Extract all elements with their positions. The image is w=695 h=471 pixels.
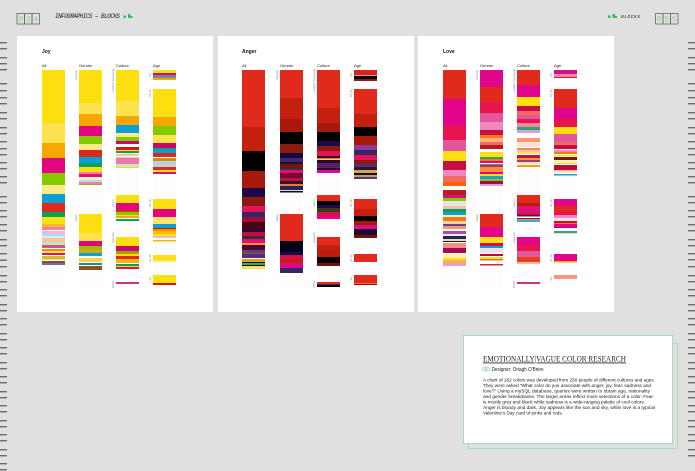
- heading: Anger: Anger: [242, 49, 256, 55]
- icon: green blocks right: [608, 14, 617, 18]
- axis labels: 26-35: [148, 199, 152, 207]
- bar: Joy All: [42, 70, 65, 290]
- body text: is mostly grey and black while sadness is a wide-ranging palette of cool colors.: [483, 400, 645, 406]
- column labels: [443, 63, 562, 68]
- column labels: Gender: [480, 63, 494, 68]
- column labels: Gender: [79, 63, 93, 68]
- column labels: Age: [153, 63, 161, 68]
- page number right: [656, 14, 678, 24]
- page number left: 4: [33, 16, 38, 24]
- axis labels: Spanish: [111, 232, 115, 243]
- bar: Anger Culture: [317, 70, 340, 290]
- axis labels: Other: [111, 280, 115, 288]
- panel: Anger: [218, 36, 414, 312]
- axis labels: Female: [74, 70, 78, 80]
- axis labels: English Speaking: [111, 68, 115, 92]
- axis labels: 46+: [148, 276, 152, 281]
- heading: Joy: Joy: [42, 49, 51, 55]
- column labels: Culture: [317, 63, 331, 68]
- bar: Joy Culture: [116, 70, 139, 290]
- designer credit: Designer: Oriagh O'Brien: [492, 367, 544, 373]
- header right: BLOCKS: [621, 14, 640, 20]
- axis labels: 26-35: [549, 199, 553, 207]
- page number right: 0: [657, 16, 662, 24]
- axis labels: 46+: [549, 276, 553, 281]
- axis labels: [475, 68, 553, 288]
- axis labels: 36-45: [148, 254, 152, 262]
- page number left: 0: [18, 16, 23, 24]
- axis labels: Other: [312, 280, 316, 288]
- axis labels: Asian: [111, 199, 115, 207]
- column labels: Culture: [116, 63, 130, 68]
- bar: Love All: [443, 70, 466, 290]
- panel: Love: [418, 36, 614, 312]
- bar: Anger Age: [354, 70, 377, 290]
- column labels: Gender: [280, 63, 294, 68]
- column labels: [242, 63, 362, 68]
- axis labels: Female: [475, 70, 479, 80]
- column labels: [42, 63, 161, 68]
- axis labels: 36-45: [549, 254, 553, 262]
- axis labels: English Speaking: [512, 68, 516, 92]
- body text: and gender breakdowns. The larger areas reflect more selections of a color. Fear: [483, 394, 653, 400]
- body text: A chart of 162 colors was developed from 250 people of different cultures and ages.: [483, 378, 655, 384]
- bar: Anger Gender: [280, 70, 303, 290]
- axis labels: Other: [512, 280, 516, 288]
- header left: INFOGRAPHICS – BLOCKS: [55, 13, 120, 20]
- axis labels: Asian: [512, 199, 516, 207]
- panel: Joy: [17, 36, 213, 312]
- bar: Joy Gender: [79, 70, 102, 290]
- page number right: 5: [664, 16, 669, 24]
- axis labels: <18: [148, 73, 152, 78]
- page number left: 3: [26, 16, 31, 24]
- panel: description card: [464, 336, 678, 448]
- icon: designer: [482, 367, 490, 371]
- axis labels: [74, 68, 152, 288]
- body text: They were asked "What color do you associate with anger, joy, fear, sadness and: [483, 383, 651, 389]
- column labels: Age: [554, 63, 562, 68]
- page number right: 5: [672, 16, 677, 24]
- axis labels: Spanish: [512, 232, 516, 243]
- axis labels: Asian: [312, 199, 316, 207]
- axis labels: <18: [349, 73, 353, 78]
- column labels: All: [242, 63, 247, 68]
- axis labels: 18-25: [349, 89, 353, 97]
- bar: Love Gender: [480, 70, 503, 290]
- body text: Anger is bloody and dark, Joy appears like the sun and sky, while love is a typical: [483, 405, 655, 411]
- bar: Anger All: [242, 70, 265, 290]
- bar: Love Culture: [517, 70, 540, 290]
- axis labels: 26-35: [349, 199, 353, 207]
- page number left: [17, 14, 40, 24]
- axis labels: Female: [275, 70, 279, 80]
- column labels: Culture: [517, 63, 531, 68]
- body text: Valentine's Day card of pinks and reds.: [483, 411, 563, 417]
- axis labels: 46+: [349, 276, 353, 281]
- column labels: All: [443, 63, 448, 68]
- column labels: Age: [354, 63, 362, 68]
- title: EMOTIONALLY|VAGUE COLOR RESEARCH: [483, 354, 626, 364]
- axis labels: 18-25: [549, 89, 553, 97]
- body text: love?" Using a mySQL database, queries were written to obtain age, nationality: [483, 389, 651, 395]
- bar: Love Age: [554, 70, 577, 290]
- axis labels: Male: [74, 214, 78, 221]
- axis labels: [275, 68, 353, 288]
- bar: Joy Age: [153, 70, 176, 290]
- axis labels: <18: [549, 73, 553, 78]
- body text: [483, 378, 655, 417]
- axis labels: Male: [275, 214, 279, 221]
- column labels: All: [42, 63, 47, 68]
- axis labels: Male: [475, 214, 479, 221]
- icon: green blocks left: [124, 14, 132, 18]
- axis labels: Spanish: [312, 232, 316, 243]
- axis labels: English Speaking: [312, 68, 316, 92]
- axis labels: 18-25: [148, 89, 152, 97]
- heading: Love: Love: [443, 49, 455, 55]
- axis labels: 36-45: [349, 254, 353, 262]
